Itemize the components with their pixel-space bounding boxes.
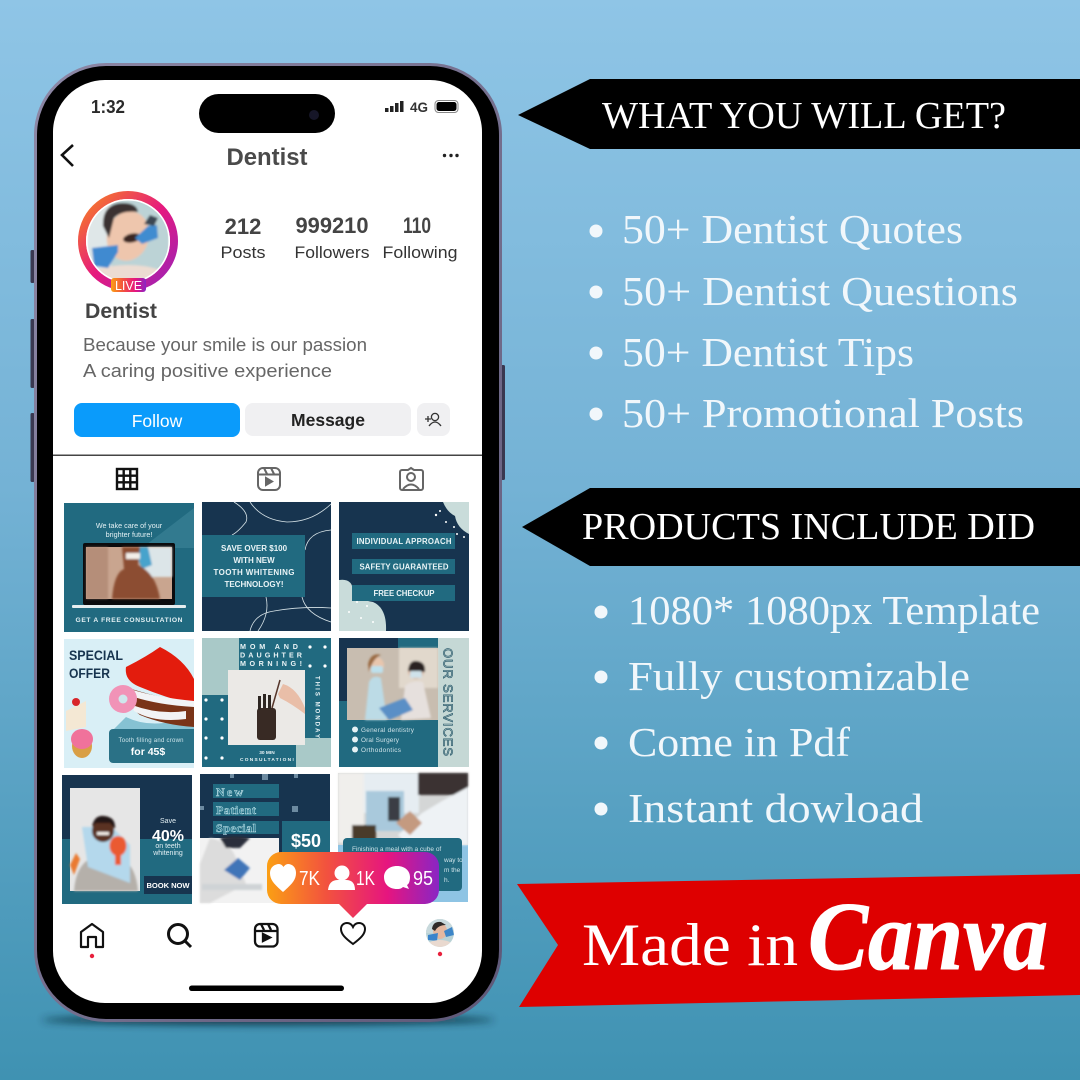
icon: reels [255,924,278,946]
post 2: tooth whitening: TOOTH WHITENING [214,568,294,577]
profile avatar with live ring [82,195,174,293]
post 8: new patient special: Patient [216,803,256,817]
post 9: doctor with x-ray [338,773,468,902]
profile name and bio: A caring positive experience [83,360,332,381]
post 8: new patient special: $50 [291,831,321,851]
ribbon: products include: PRODUCTS INCLUDE DID [582,506,1035,548]
post 9: doctor with x-ray: h. [444,877,450,884]
comments count: 95 [413,868,433,890]
post 4: special offer: for 45$ [131,746,165,758]
phone shadow [42,1015,494,1025]
icon: search [168,924,191,947]
phone side buttons [30,250,505,482]
ribbon: what you will get [518,79,1080,149]
profile action buttons: Follow [132,411,183,431]
post 7: save 40 percent: 40% [152,828,184,845]
post 8: new patient special: Special [216,821,257,835]
post 6: our services: Orthodontics [361,747,401,754]
icon: comment bubble [384,866,410,889]
ribbon: products include [522,488,1080,566]
post 1: free consultation: GET A FREE CONSULTATION [76,617,183,624]
post 5: mom and daughter morning: MORNING! [240,659,302,668]
post 1: free consultation: We take care of your [96,521,163,530]
red ribbon: made in canva [517,874,1080,1007]
icon: person [328,866,355,890]
bottom navigation [81,919,454,958]
post 1: free consultation: brighter future! [106,530,152,539]
profile name and bio: Because your smile is our passion [83,334,367,355]
post 7: save 40 percent: whitening [152,850,183,857]
status bar: 1:32 [91,97,125,117]
profile action buttons [74,403,450,437]
phone mockup [30,63,505,1025]
post 2: tooth whitening: WITH NEW [233,556,275,565]
post 2: tooth whitening: SAVE OVER $100 [221,544,288,553]
profile avatar with live ring: LIVE [115,279,142,293]
icon: heart outline [341,923,365,944]
post 4: special offer [64,639,199,768]
post 1: free consultation [64,503,194,632]
red ribbon: made in canva: Made in [582,912,798,978]
post 5: mom and daughter morning: 30 MIN [259,750,275,756]
tab icon: grid [117,469,137,489]
icon: heart [270,864,296,892]
header: back, title, menu: Dentist [226,144,308,171]
post 2: tooth whitening [202,502,331,631]
phone screen [53,80,482,1003]
post 4: special offer: SPECIAL [69,647,123,663]
post 6: our services [339,638,469,767]
profile name and bio: Dentist [85,300,157,323]
profile stats: Following [382,243,458,262]
list: what you will get [590,206,1024,436]
list: what you will get: 50+ Promotional Posts [622,390,1024,436]
list: products include [594,587,1040,831]
profile action buttons: Message [291,410,365,430]
tab icon: reels [258,468,280,490]
dynamic island [199,94,335,133]
post 9: doctor with x-ray: Finishing a meal with a cube of [352,846,441,853]
post 7: save 40 percent: BOOK NOW [146,881,190,890]
profile stats: Followers [294,243,370,262]
icon: home [81,924,103,947]
red ribbon: made in canva: Canva [808,883,1048,991]
post 8: new patient special [200,774,330,903]
post 3: services list: SAFETY GUARANTEED [360,562,449,572]
engagement badge [267,852,439,918]
post 6: our services: OUR SERVICES [440,648,456,756]
post 5: mom and daughter morning: MOM AND [240,642,298,651]
list: what you will get: 50+ Dentist Tips [622,329,914,375]
post 5: mom and daughter morning: CONSULTATION! [240,757,294,763]
post 9: doctor with x-ray: way to [443,857,463,864]
post 9: doctor with x-ray: m the [444,867,461,874]
post 7: save 40 percent: Save [160,818,176,825]
post 6: our services: General dentistry [361,727,415,734]
profile stats: 999210 [296,213,368,238]
post 4: special offer: OFFER [69,665,110,681]
notification dots [90,952,442,958]
list: products include: 1080* 1080px Template [628,587,1040,633]
profile stats: Posts [220,243,266,262]
icon: profile avatar [426,919,454,947]
post 3: services list: FREE CHECKUP [374,589,434,598]
post 3: services list [339,502,469,631]
post 8: new patient special: New [216,785,243,799]
post 5: mom and daughter morning: DAUGHTER [240,650,303,660]
status bar [91,97,458,117]
phone body [34,63,502,1022]
followers count: 1K [356,868,376,890]
profile stats: 212 [225,214,261,239]
post 7: save 40 percent: on teeth [155,843,181,850]
header: back, title, menu [62,144,459,171]
profile stats [220,213,458,262]
tab icon: tagged [400,468,423,490]
post 4: special offer: Tooth filling and crown [118,738,184,744]
divider [53,454,482,456]
list: products include: Come in Pdf [628,719,850,765]
list: products include: Instant dowload [628,785,923,831]
likes count: 7K [299,868,321,890]
list: what you will get: 50+ Dentist Quotes [622,206,963,252]
status bar: 4G [410,99,428,115]
profile name and bio [83,300,367,381]
post 2: tooth whitening: TECHNOLOGY! [224,580,284,589]
post 7: save 40 percent [62,775,192,904]
post 6: our services: Oral Surgery [361,737,400,744]
post 5: mom and daughter morning [202,638,331,767]
home indicator [189,986,344,991]
list: products include: Fully customizable [628,653,970,699]
post 5: mom and daughter morning: THIS MONDAY [314,676,320,738]
ribbon: what you will get: WHAT YOU WILL GET? [602,95,1006,137]
profile stats: 110 [403,213,431,238]
post 3: services list: INDIVIDUAL APPROACH [356,537,452,546]
list: what you will get: 50+ Dentist Questions [622,268,1018,314]
